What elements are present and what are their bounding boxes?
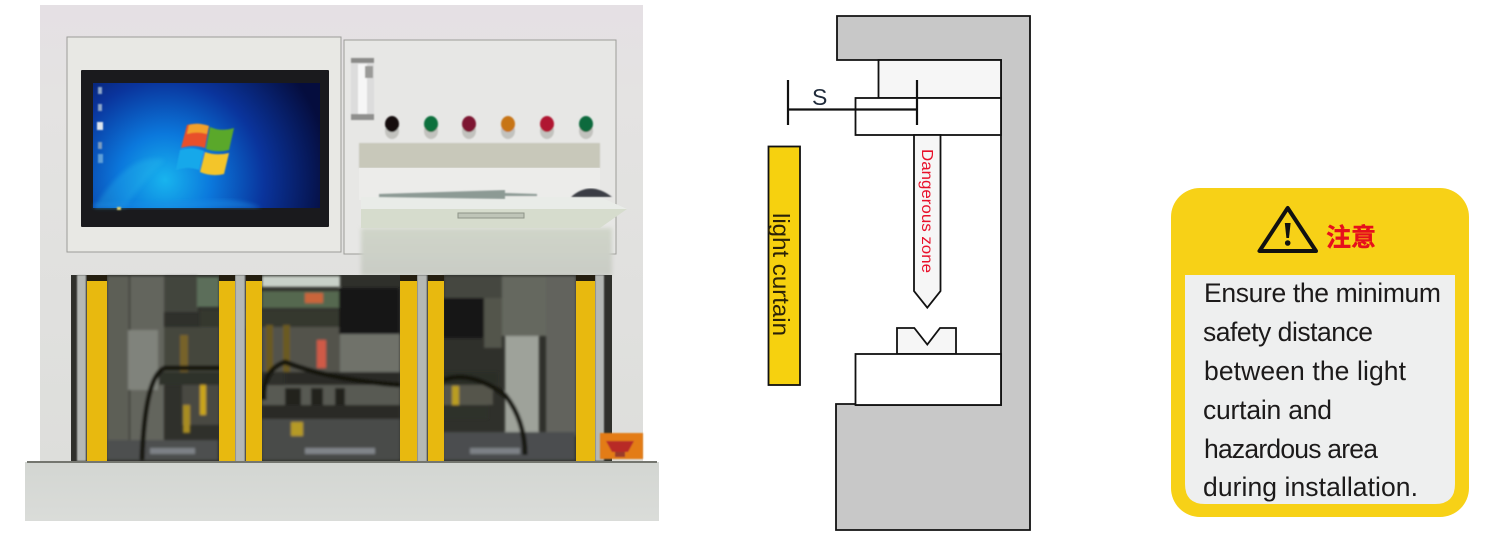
keyboard shelf — [359, 143, 627, 276]
notice text: hazardous area — [1204, 434, 1378, 464]
silver posts — [77, 275, 604, 462]
notice text: Ensure the minimum — [1204, 278, 1441, 308]
upper ram — [878, 60, 1001, 98]
punch dangerous zone — [914, 135, 940, 308]
indicator lamps — [385, 116, 593, 139]
notice text panel — [1185, 275, 1455, 504]
diagram: safety distance — [768, 16, 1030, 530]
machine cabinet body — [40, 5, 643, 465]
mouse — [571, 188, 612, 197]
upper beam — [856, 98, 1001, 135]
light curtain bar — [768, 146, 800, 385]
door handle — [351, 58, 374, 120]
callout: caution notice — [1171, 188, 1469, 517]
machine base — [25, 461, 659, 521]
control panel — [344, 40, 627, 276]
cables — [142, 368, 220, 460]
notice text — [1203, 278, 1441, 502]
press frame — [836, 16, 1030, 530]
icon: warning triangle — [1260, 208, 1316, 251]
light curtain bar: light curtain — [768, 213, 794, 336]
black servo boxes — [339, 288, 399, 334]
callout yellow card — [1171, 188, 1469, 517]
light curtain strips — [87, 275, 595, 462]
monitor panel — [67, 37, 341, 252]
lower safety window — [71, 275, 612, 462]
desktop icons — [97, 87, 121, 210]
photo: machine with light curtains — [25, 5, 659, 521]
die — [897, 328, 956, 354]
heading: caution: 注意 — [1326, 223, 1376, 252]
lower table — [856, 354, 1001, 405]
safety distance dimension S: S — [812, 84, 827, 110]
icon: windows logo — [176, 124, 234, 175]
notice text: during installation. — [1203, 472, 1418, 502]
stylus — [379, 190, 537, 199]
machine interior — [107, 276, 576, 460]
safety distance dimension S — [788, 80, 917, 125]
punch dangerous zone: Dangerous zone — [918, 149, 935, 273]
notice text: safety distance — [1203, 317, 1373, 347]
notice text: between the light — [1204, 356, 1407, 386]
notice text: curtain and — [1203, 395, 1332, 425]
monitor with desktop — [81, 70, 329, 227]
emergency stop button — [600, 433, 643, 459]
